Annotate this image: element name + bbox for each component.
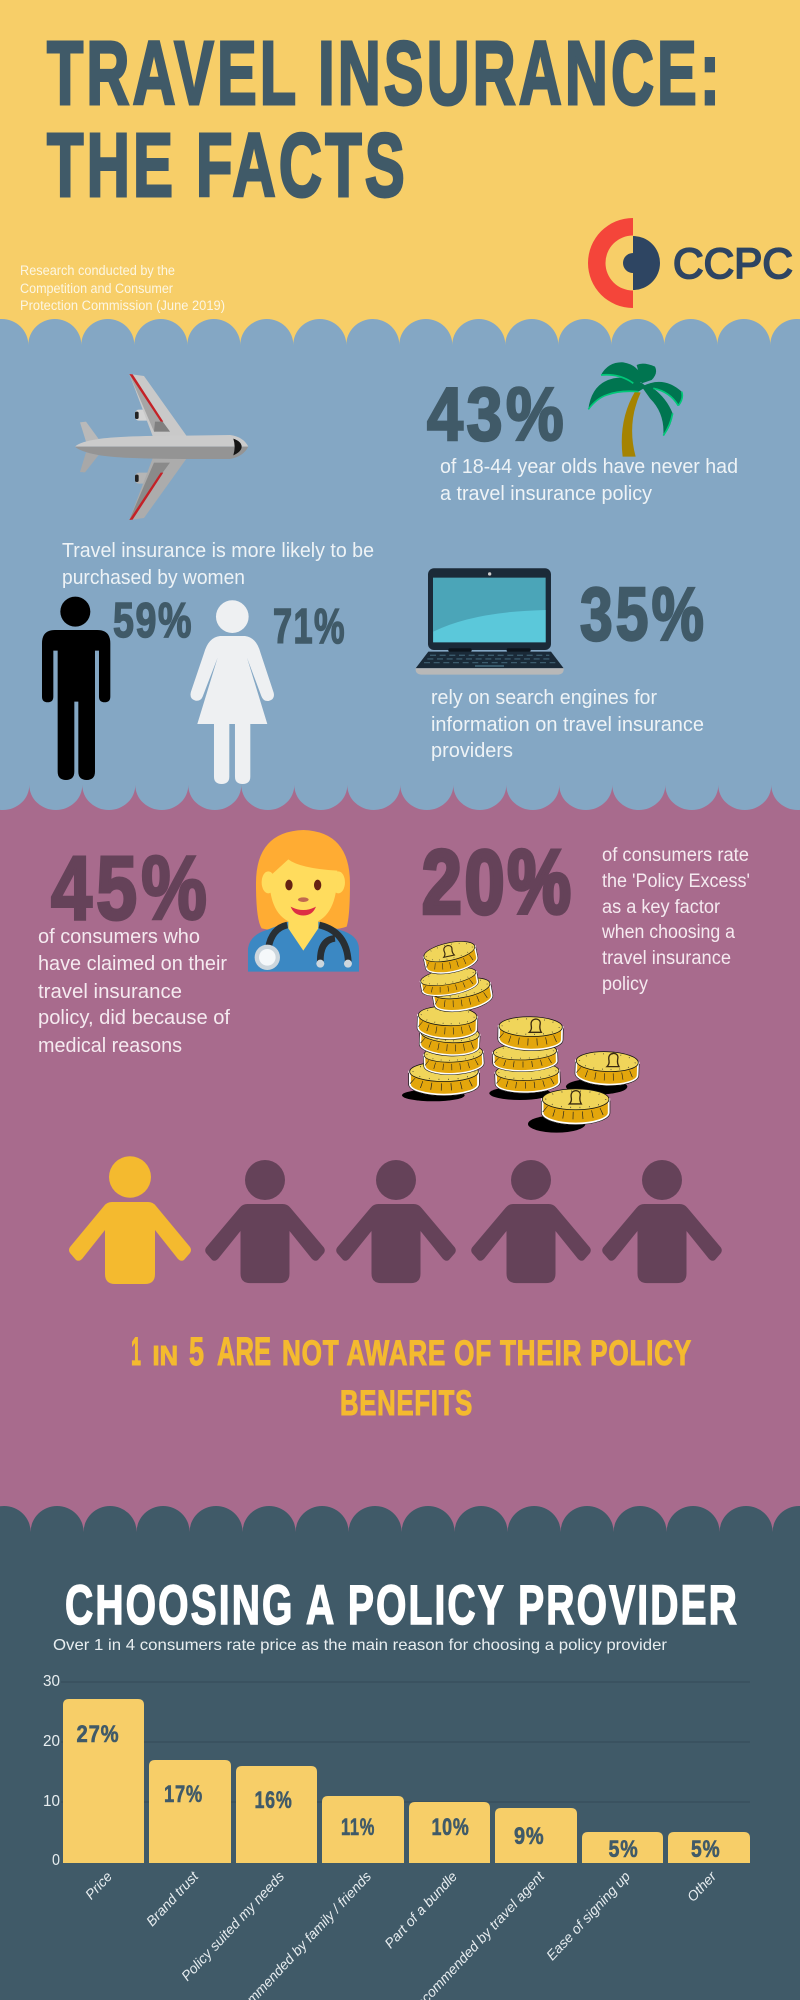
panel: dark chart section background: [0, 1506, 800, 2000]
text block: research credit: Competition and Consumer: [20, 281, 173, 296]
category labels: Brand trust: [143, 1867, 202, 1929]
icon: man figure: [42, 597, 110, 780]
category labels: Other: [684, 1867, 720, 1905]
bar value labels: 10%: [432, 1814, 470, 1841]
text block: policy excess: policy: [602, 974, 648, 995]
text block: medical reasons: policy, did because of: [38, 1007, 230, 1029]
panel: pink section background: [0, 700, 800, 1600]
bar chart: [43, 1673, 750, 2000]
text block: search engines: [431, 687, 704, 762]
category labels: Policy suited my needs: [178, 1868, 287, 1984]
icon row: five people, one highlighted: [69, 1156, 722, 1284]
stat: 20%: 20%: [422, 833, 574, 933]
category labels: Ease of signing up: [543, 1868, 633, 1963]
stat: 43%: 43%: [427, 372, 567, 456]
text block: chart subtitle: Over 1 in 4 consumers rate price as the main reason for choosing a policy provider: [53, 1637, 668, 1654]
icon: laptop: [416, 568, 564, 675]
icon: airplane: [75, 374, 248, 520]
icon: female doctor: [248, 830, 359, 972]
chart axis labels: 0: [52, 1852, 60, 1869]
panel: blue section background: [0, 319, 800, 810]
text block: policy excess: when choosing a: [601, 922, 735, 943]
chart axis labels: [43, 1673, 60, 1869]
text block: women purchase: Travel insurance is more likely to be: [62, 540, 374, 562]
text block: medical reasons: of consumers who: [38, 926, 200, 948]
icon: coin stacks: [402, 937, 640, 1133]
category labels: Price: [82, 1868, 115, 1902]
text block: women purchase: [62, 540, 374, 589]
bar value labels: [76, 1721, 720, 1863]
stat: 45%: 45%: [51, 839, 211, 939]
text block: search engines: providers: [431, 740, 513, 762]
text block: research credit: Protection Commission (June 2019): [20, 298, 225, 313]
heading: 1 in 5 not aware: [131, 1330, 692, 1423]
heading: 1 in 5 not aware: 1: [131, 1330, 141, 1374]
stat: 59%: 59%: [113, 594, 193, 648]
bar value labels: 5%: [608, 1836, 638, 1863]
panel: header background: [0, 0, 800, 400]
heading: 1 in 5 not aware: IN: [152, 1340, 178, 1371]
text block: medical reasons: have claimed on their: [38, 953, 227, 975]
title: THE FACTS: [47, 116, 408, 216]
icon: CCPC logo: CCPC: [673, 240, 793, 288]
icon: person 3: [336, 1160, 456, 1283]
chart axis labels: 30: [43, 1673, 60, 1690]
text block: 18-44 year olds: a travel insurance policy: [440, 483, 652, 505]
text block: medical reasons: [38, 926, 230, 1057]
text block: research credit: Research conducted by the: [20, 263, 175, 278]
bar value labels: 11%: [341, 1814, 375, 1841]
text block: policy excess: the 'Policy Excess': [602, 871, 750, 892]
bars: [63, 1699, 750, 1863]
text block: medical reasons: travel insurance: [38, 981, 182, 1003]
icon: person 2: [205, 1160, 325, 1283]
text block: medical reasons: medical reasons: [38, 1035, 182, 1057]
stat: 71%: 71%: [273, 600, 346, 654]
text block: research credit: [20, 263, 225, 313]
icon: palm tree: [588, 362, 682, 457]
icon: CCPC logo: [588, 218, 793, 308]
text block: women purchase: purchased by women: [62, 567, 245, 589]
text block: policy excess: as a key factor: [602, 897, 721, 918]
text block: 18-44 year olds: [440, 456, 738, 505]
text block: policy excess: [601, 845, 750, 995]
text block: policy excess: travel insurance: [602, 948, 731, 969]
chart axis labels: 20: [43, 1733, 60, 1750]
title: [47, 24, 723, 216]
text block: 18-44 year olds: of 18-44 year olds have never had: [440, 456, 738, 478]
icon: person 5: [602, 1160, 722, 1283]
stat: 35%: 35%: [580, 572, 707, 656]
heading: 1 in 5 not aware: ARE: [217, 1330, 271, 1374]
icon: woman figure: [191, 600, 274, 784]
bar value labels: 16%: [254, 1787, 292, 1814]
text block: policy excess: of consumers rate: [602, 845, 749, 866]
bar value labels: 5%: [691, 1836, 720, 1863]
category labels: Part of a bundle: [381, 1868, 460, 1951]
category labels: [82, 1867, 720, 2000]
bar value labels: 27%: [76, 1721, 120, 1748]
icon: highlighted person: [69, 1156, 191, 1284]
text block: search engines: information on travel insurance: [431, 714, 704, 736]
icon: person 4: [471, 1160, 591, 1283]
heading: 1 in 5 not aware: 5: [189, 1330, 204, 1374]
bar value labels: 9%: [514, 1823, 544, 1850]
text block: search engines: rely on search engines for: [431, 687, 657, 709]
heading: 1 in 5 not aware: BENEFITS: [340, 1384, 473, 1423]
chart axis labels: 10: [43, 1793, 60, 1810]
bar value labels: 17%: [164, 1781, 203, 1808]
